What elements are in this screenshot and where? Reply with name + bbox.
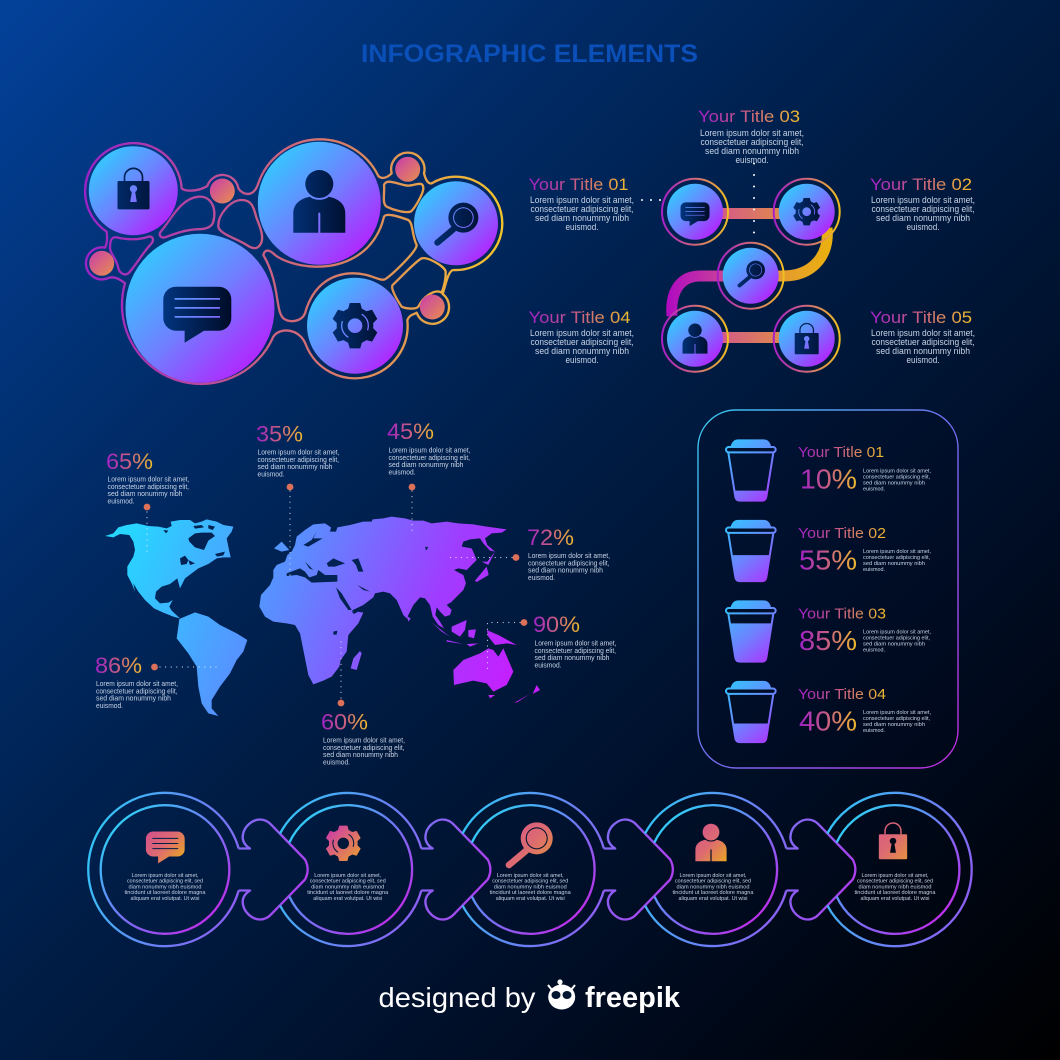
stat 60%: euismod. bbox=[323, 757, 350, 766]
label 05: Your Title 05 bbox=[870, 308, 972, 327]
node: user bbox=[258, 142, 381, 265]
panel: coffee cups bbox=[698, 410, 958, 768]
network outlines bbox=[85, 139, 502, 384]
stat 45% bbox=[387, 419, 470, 476]
stat 35%: sed diam nonummy nibh bbox=[258, 462, 332, 471]
stat 60%: Lorem ipsum dolor sit amet, bbox=[323, 736, 405, 744]
label 02: consectetuer adipiscing elit, bbox=[872, 204, 974, 214]
eurasia, africa, oceania bbox=[259, 517, 540, 703]
stat 72%: Lorem ipsum dolor sit amet, bbox=[528, 551, 610, 560]
cup text 03 bbox=[798, 606, 931, 656]
cup text 04: Lorem ipsum dolor sit amet, bbox=[863, 710, 931, 716]
label 05: Lorem ipsum dolor sit amet, bbox=[871, 328, 975, 338]
dotted leaders bbox=[642, 164, 754, 233]
cup 10% bbox=[726, 439, 776, 501]
icon: magnifier bbox=[506, 822, 553, 868]
node: gear bbox=[307, 278, 403, 374]
step text 1 bbox=[124, 873, 206, 902]
cup text 03: euismod. bbox=[863, 648, 885, 654]
label 02: euismod. bbox=[906, 222, 940, 232]
label 01 bbox=[528, 175, 634, 232]
americas bbox=[105, 519, 247, 716]
cup text 01: consectetuer adipiscing elit, bbox=[863, 475, 930, 481]
panel: chevron chain bbox=[88, 793, 972, 946]
cup text 02: euismod. bbox=[863, 567, 885, 573]
label 02: sed diam nonummy nibh bbox=[876, 213, 970, 223]
label 03: sed diam nonummy nibh bbox=[705, 146, 799, 156]
stat 90%: sed diam nonummy nibh bbox=[534, 653, 610, 662]
label 04: consectetuer adipiscing elit, bbox=[530, 337, 634, 347]
icon: gear bbox=[326, 826, 361, 861]
stat 90%: consectetuer adipiscing elit, bbox=[534, 646, 616, 655]
stat 35%: consectetuer adipiscing elit, bbox=[258, 455, 339, 464]
step text 2: consectetuer adipiscing elit, sed bbox=[310, 879, 386, 885]
stat 45%: consectetuer adipiscing elit, bbox=[388, 453, 470, 462]
label 03 bbox=[698, 107, 804, 165]
label 03: euismod. bbox=[736, 155, 768, 165]
icon: user bbox=[695, 824, 727, 861]
cup text 02: consectetuer adipiscing elit, bbox=[863, 555, 930, 561]
stat 86%: consectetuer adipiscing elit, bbox=[96, 686, 178, 695]
stat 72%: euismod. bbox=[528, 573, 555, 582]
step text 1: diam nonummy nibh euismod bbox=[128, 884, 202, 890]
cup text 02: Lorem ipsum dolor sit amet, bbox=[863, 549, 931, 555]
label 03: Your Title 03 bbox=[698, 107, 800, 126]
cup text 01: 10% bbox=[800, 463, 857, 494]
stat 60%: 60% bbox=[321, 710, 368, 734]
stat 65%: Lorem ipsum dolor sit amet, bbox=[108, 474, 190, 484]
ring step 2 with arrow bbox=[280, 793, 490, 946]
step text 2: diam nonummy nibh euismod bbox=[311, 884, 384, 890]
node 1 bbox=[662, 179, 728, 245]
icon: freepik mascot bbox=[548, 979, 575, 1010]
map pins bbox=[144, 484, 527, 706]
stat 60% bbox=[321, 710, 405, 766]
step text 5: consectetuer adipiscing elit, sed bbox=[857, 879, 933, 885]
cup text 01 bbox=[798, 445, 931, 494]
cup text 01: euismod. bbox=[863, 487, 885, 493]
label 05: euismod. bbox=[906, 355, 940, 365]
stat 60%: sed diam nonummy nibh bbox=[323, 750, 398, 759]
stat 72%: consectetuer adipiscing elit, bbox=[528, 558, 610, 567]
stat 35% bbox=[256, 422, 340, 478]
cup text 04: euismod. bbox=[863, 728, 885, 734]
stat 65% bbox=[106, 449, 190, 505]
freepik: freepik bbox=[585, 982, 681, 1014]
cup text 03: 85% bbox=[799, 625, 857, 656]
stat 72%: sed diam nonummy nibh bbox=[528, 566, 603, 574]
label 03: Lorem ipsum dolor sit amet, bbox=[700, 128, 804, 138]
step text 2: tincidunt ut laoreet dolore magna bbox=[307, 890, 389, 896]
step text 1: aliquam erat volutpat. Ut wisi bbox=[130, 896, 200, 902]
stat 72% bbox=[527, 525, 610, 582]
ring step 5 bbox=[827, 793, 972, 946]
step text 5 bbox=[854, 873, 936, 902]
node 2 bbox=[774, 179, 840, 245]
step text 1: consectetuer adipiscing elit, sed bbox=[127, 879, 203, 885]
cup text 02: Your Title 02 bbox=[798, 526, 886, 542]
stat 86% bbox=[95, 653, 178, 710]
stat 65%: euismod. bbox=[108, 496, 134, 505]
label 01: Your Title 01 bbox=[528, 175, 628, 194]
label 02 bbox=[870, 175, 975, 232]
cup text 02: 55% bbox=[799, 544, 857, 575]
step text 3 bbox=[490, 873, 571, 902]
cup text 03: consectetuer adipiscing elit, bbox=[863, 636, 930, 642]
panel: bubble network bbox=[85, 139, 502, 384]
step text 4: consectetuer adipiscing elit, sed bbox=[675, 879, 751, 885]
stat 90%: Lorem ipsum dolor sit amet, bbox=[534, 638, 616, 648]
panel: process flow bbox=[528, 107, 975, 372]
node: chat bbox=[126, 234, 274, 383]
label 01: sed diam nonummy nibh bbox=[535, 213, 629, 223]
label 04: Your Title 04 bbox=[528, 308, 630, 327]
node 5 bbox=[774, 306, 840, 372]
step text 5: aliquam erat volutpat. Ut wisi bbox=[860, 896, 930, 902]
step text 5: Lorem ipsum dolor sit amet, bbox=[862, 873, 929, 879]
stat 35%: Lorem ipsum dolor sit amet, bbox=[258, 448, 340, 456]
cup 40% bbox=[726, 681, 776, 742]
step text 3: Lorem ipsum dolor sit amet, bbox=[497, 873, 564, 879]
stat 90%: euismod. bbox=[534, 660, 562, 669]
label 04 bbox=[528, 308, 634, 365]
cup text 04: Your Title 04 bbox=[798, 687, 886, 703]
step text 5: diam nonummy nibh euismod bbox=[858, 884, 932, 890]
label 02: Lorem ipsum dolor sit amet, bbox=[871, 195, 975, 205]
step text 4: diam nonummy nibh euismod bbox=[676, 884, 750, 890]
stat 90% bbox=[533, 612, 616, 669]
label 01: consectetuer adipiscing elit, bbox=[530, 204, 634, 214]
step text 3: diam nonummy nibh euismod bbox=[494, 884, 567, 890]
stat 90%: 90% bbox=[533, 612, 580, 637]
panel frame bbox=[698, 410, 958, 768]
footer: freepik credit bbox=[378, 979, 681, 1014]
step text 1: tincidunt ut laoreet dolore magna bbox=[124, 890, 206, 896]
cup text 04: sed diam nonummy nibh bbox=[863, 722, 925, 728]
cup text 01: Lorem ipsum dolor sit amet, bbox=[863, 469, 931, 475]
ring step 3 with arrow bbox=[463, 793, 673, 946]
label 03: consectetuer adipiscing elit, bbox=[700, 137, 804, 147]
cup text 03: sed diam nonummy nibh bbox=[863, 642, 925, 648]
cup text 04 bbox=[798, 687, 931, 736]
stat 86%: sed diam nonummy nibh bbox=[96, 694, 171, 702]
node 3 bbox=[718, 243, 784, 309]
step text 5: tincidunt ut laoreet dolore magna bbox=[854, 890, 936, 896]
node 4 bbox=[662, 306, 728, 372]
cup text 02 bbox=[798, 526, 931, 575]
stat 45%: sed diam nonummy nibh bbox=[388, 460, 464, 469]
step text 3: aliquam erat volutpat. Ut wisi bbox=[496, 896, 565, 902]
connectors bbox=[672, 214, 827, 338]
node: lock bbox=[89, 146, 178, 235]
stat 35%: 35% bbox=[256, 422, 303, 446]
step text 2: Lorem ipsum dolor sit amet, bbox=[314, 873, 382, 879]
icon: lock bbox=[879, 823, 907, 859]
label 05 bbox=[870, 308, 975, 365]
step text 3: tincidunt ut laoreet dolore magna bbox=[490, 890, 571, 896]
title: INFOGRAPHIC ELEMENTS bbox=[361, 40, 698, 68]
step text 2: aliquam erat volutpat. Ut wisi bbox=[313, 896, 382, 902]
stat 45%: 45% bbox=[387, 419, 434, 444]
stat 65%: sed diam nonummy nibh bbox=[108, 489, 182, 498]
stat 65%: 65% bbox=[106, 449, 153, 474]
cup text 03: Lorem ipsum dolor sit amet, bbox=[863, 630, 931, 636]
label 05: sed diam nonummy nibh bbox=[876, 346, 970, 356]
panel: world map bbox=[95, 419, 616, 766]
cup text 04: consectetuer adipiscing elit, bbox=[863, 716, 930, 722]
ring step 4 with arrow bbox=[645, 793, 855, 946]
stat 86%: euismod. bbox=[96, 701, 123, 710]
stat 86%: Lorem ipsum dolor sit amet, bbox=[96, 679, 178, 688]
stat 45%: Lorem ipsum dolor sit amet, bbox=[388, 446, 470, 454]
cup 55% bbox=[726, 520, 776, 581]
stat 35%: euismod. bbox=[258, 469, 284, 478]
node: magnifier bbox=[414, 181, 498, 265]
step text 4: aliquam erat volutpat. Ut wisi bbox=[678, 896, 748, 902]
label 02: Your Title 02 bbox=[870, 175, 972, 194]
label 01: Lorem ipsum dolor sit amet, bbox=[530, 195, 634, 205]
cup text 03: Your Title 03 bbox=[798, 606, 886, 622]
label 04: sed diam nonummy nibh bbox=[535, 346, 629, 356]
cup text 01: sed diam nonummy nibh bbox=[863, 481, 925, 487]
cup text 01: Your Title 01 bbox=[798, 445, 884, 461]
cup text 04: 40% bbox=[799, 705, 857, 736]
dotted leaders bbox=[147, 491, 520, 698]
stat 60%: consectetuer adipiscing elit, bbox=[323, 743, 404, 752]
label 04: euismod. bbox=[566, 355, 598, 365]
label 01: euismod. bbox=[566, 222, 598, 232]
cup 85% bbox=[726, 600, 776, 662]
stat 65%: consectetuer adipiscing elit, bbox=[108, 482, 189, 491]
stat 45%: euismod. bbox=[388, 467, 416, 476]
stat 72%: 72% bbox=[527, 525, 574, 550]
stat 86%: 86% bbox=[95, 653, 142, 678]
small connector nodes bbox=[89, 157, 445, 320]
cup text 02: sed diam nonummy nibh bbox=[863, 561, 925, 567]
step text 4: tincidunt ut laoreet dolore magna bbox=[672, 890, 754, 896]
designed by: designed by bbox=[378, 982, 536, 1013]
icon: chat bbox=[146, 831, 185, 863]
step text 4: Lorem ipsum dolor sit amet, bbox=[680, 873, 747, 879]
label 05: consectetuer adipiscing elit, bbox=[872, 337, 974, 347]
step text 4 bbox=[672, 873, 754, 902]
step text 1: Lorem ipsum dolor sit amet, bbox=[132, 873, 199, 879]
step text 3: consectetuer adipiscing elit, sed bbox=[492, 879, 568, 885]
label 04: Lorem ipsum dolor sit amet, bbox=[530, 328, 634, 338]
ring step 1 with arrow bbox=[88, 793, 308, 946]
step text 2 bbox=[307, 873, 389, 902]
